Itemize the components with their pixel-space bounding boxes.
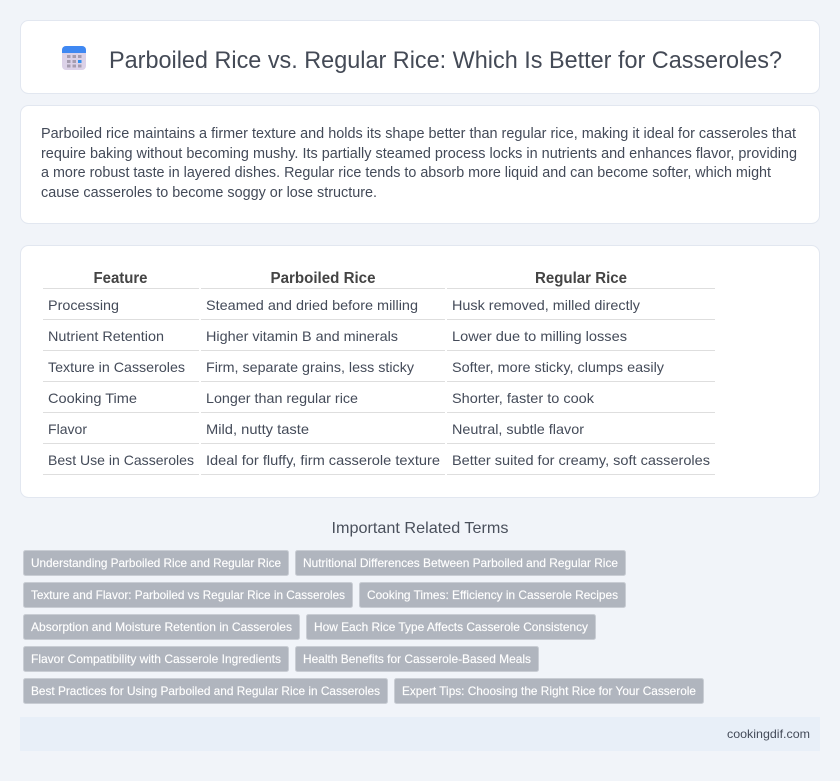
tag bbox=[24, 678, 388, 704]
tag: Flavor Compatibility with Casserole Ingredients bbox=[31, 652, 281, 666]
table header: Feature bbox=[94, 270, 148, 287]
tag bbox=[296, 646, 538, 672]
tag: How Each Rice Type Affects Casserole Consistency bbox=[314, 620, 588, 634]
row: best use: Best Use in Casseroles bbox=[48, 452, 194, 468]
tag: Nutritional Differences Between Parboiled and Regular Rice bbox=[303, 556, 618, 570]
row: texture: Firm, separate grains, less sticky bbox=[206, 359, 414, 375]
row: processing: Processing bbox=[48, 297, 119, 313]
row: nutrient retention: Nutrient Retention bbox=[48, 328, 164, 344]
row: texture bbox=[43, 359, 715, 382]
row: best use bbox=[43, 452, 715, 475]
row: cooking time: Longer than regular rice bbox=[206, 390, 358, 406]
row: processing bbox=[43, 297, 715, 320]
row: cooking time: Cooking Time bbox=[48, 390, 137, 406]
table header bbox=[43, 270, 715, 289]
icon: calendar bbox=[62, 46, 86, 70]
panel: related term tags bbox=[24, 550, 704, 704]
row: cooking time bbox=[43, 390, 715, 413]
tag bbox=[394, 678, 704, 704]
tag bbox=[306, 614, 596, 640]
tag: Texture and Flavor: Parboiled vs Regular Rice in Casseroles bbox=[31, 588, 345, 602]
panel: intro text: cause casseroles to become soggy or lose structure. bbox=[41, 185, 377, 201]
table header: Regular Rice bbox=[535, 270, 627, 287]
tag bbox=[296, 550, 626, 576]
tag: Absorption and Moisture Retention in Casseroles bbox=[31, 620, 292, 634]
row: flavor: Mild, nutty taste bbox=[206, 421, 309, 437]
row: texture: Softer, more sticky, clumps easily bbox=[452, 359, 664, 375]
panel: comparison table bbox=[20, 246, 820, 498]
row: processing: Husk removed, milled directly bbox=[452, 297, 640, 313]
row: flavor bbox=[43, 421, 715, 444]
panel: intro text: a more robust taste in layered dishes. Regular rice tends to absorb more liquid and can become softer, which might bbox=[41, 165, 771, 181]
title: Parboiled Rice vs. Regular Rice: Which Is Better for Casseroles? bbox=[109, 47, 782, 74]
footer bbox=[20, 717, 820, 751]
row: texture: Texture in Casseroles bbox=[48, 359, 185, 375]
tag bbox=[24, 646, 288, 672]
heading: related terms: Important Related Terms bbox=[332, 520, 508, 537]
tag bbox=[24, 582, 352, 608]
row: nutrient retention: Higher vitamin B and minerals bbox=[206, 328, 398, 344]
panel: intro text: Parboiled rice maintains a firmer texture and holds its shape better than regular rice, making it ideal for casseroles that bbox=[41, 126, 796, 142]
tag bbox=[24, 614, 300, 640]
panel: intro text: require baking without becoming mushy. Its partially steamed process locks in nutrients and enhances flavor, providing bbox=[41, 146, 797, 162]
tag bbox=[24, 550, 288, 576]
tag: Best Practices for Using Parboiled and Regular Rice in Casseroles bbox=[31, 684, 380, 698]
tag: Understanding Parboiled Rice and Regular Rice bbox=[31, 556, 281, 570]
row: best use: Better suited for creamy, soft casseroles bbox=[452, 452, 710, 468]
row: cooking time: Shorter, faster to cook bbox=[452, 390, 595, 406]
row: processing: Steamed and dried before milling bbox=[206, 297, 418, 313]
row: nutrient retention bbox=[43, 328, 715, 351]
panel: title card bbox=[20, 20, 820, 94]
footer: cookingdif.com bbox=[727, 727, 810, 741]
tag bbox=[360, 582, 626, 608]
tag: Expert Tips: Choosing the Right Rice for Your Casserole bbox=[402, 684, 696, 698]
panel: intro text bbox=[20, 106, 820, 224]
row: flavor: Flavor bbox=[48, 421, 87, 437]
tag: Cooking Times: Efficiency in Casserole Recipes bbox=[367, 588, 618, 602]
row: best use: Ideal for fluffy, firm casserole texture bbox=[206, 452, 440, 468]
row: flavor: Neutral, subtle flavor bbox=[452, 421, 584, 437]
table header: Parboiled Rice bbox=[270, 270, 376, 287]
row: nutrient retention: Lower due to milling losses bbox=[452, 328, 627, 344]
tag: Health Benefits for Casserole-Based Meals bbox=[303, 652, 531, 666]
